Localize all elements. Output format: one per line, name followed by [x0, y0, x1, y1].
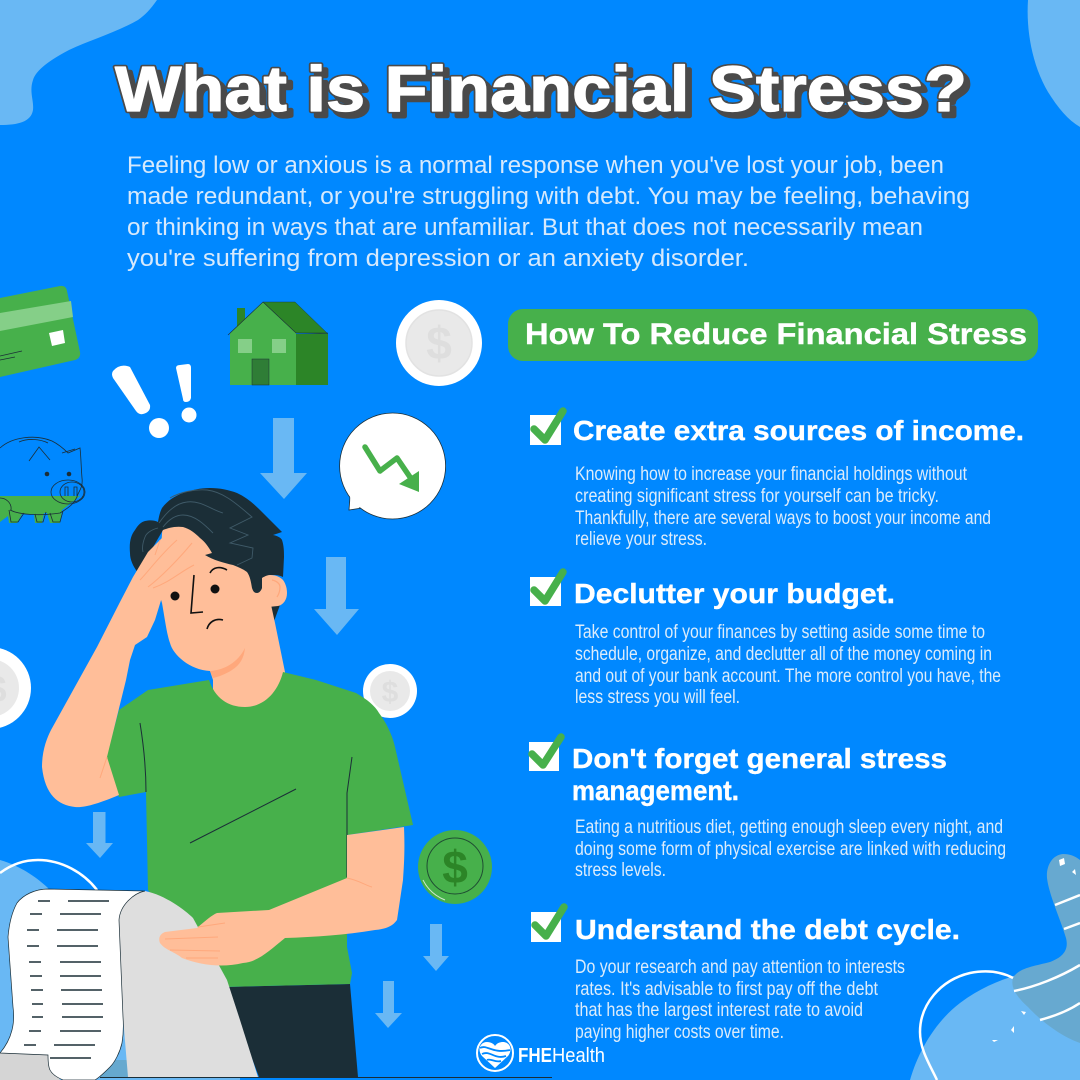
item 3 body: stress levels. — [575, 860, 666, 881]
item 1 heading: Create extra sources of income. — [573, 415, 1024, 446]
icon: silver coin small: $ — [382, 676, 399, 709]
blob: top right — [1028, 0, 1080, 127]
intro paragraph: made redundant, or you're struggling with debt. You may be feeling, behaving — [127, 183, 970, 210]
item 3 heading — [572, 743, 947, 806]
item 2 heading: Declutter your budget. — [574, 578, 895, 609]
hair — [130, 488, 284, 593]
logo: FHE Health: Health — [552, 1045, 605, 1067]
brow nose and mouth — [191, 568, 227, 629]
logo: FHE Health: FHE — [518, 1045, 552, 1067]
item 3 body: doing some form of physical exercise are linked with reducing — [575, 839, 1006, 860]
blob: bottom right — [910, 854, 1080, 1080]
arrow: right of head — [314, 557, 359, 635]
item 2 body: and out of your bank account. The more control you have, the — [575, 666, 1001, 687]
arrow: lower right two — [375, 981, 402, 1028]
title: What is Financial Stress? — [115, 53, 967, 125]
intro paragraph: Feeling low or anxious is a normal response when you've lost your job, been — [127, 152, 944, 179]
title: What is Financial Stress? — [120, 58, 972, 130]
icon: green dollar coin — [418, 830, 492, 904]
neck and face — [158, 518, 285, 712]
item 1 body: Knowing how to increase your financial holdings without — [575, 464, 968, 485]
check icon 4 — [531, 907, 564, 942]
intro paragraph — [127, 152, 970, 272]
hair behind neck — [268, 605, 280, 624]
check icon 1 — [530, 411, 563, 445]
arrow: below house — [260, 418, 307, 499]
title: What is Financial Stress? — [115, 53, 967, 125]
blob: top left — [0, 0, 157, 125]
chin shadow — [210, 648, 245, 678]
icon: silver coin left — [0, 647, 31, 729]
arrow: left small — [86, 812, 113, 858]
icon: silver coin small — [363, 664, 417, 718]
item 4 body: rates. It's advisable to first pay off the debt — [575, 979, 879, 1000]
item 1 body — [575, 464, 991, 550]
raised arm and hand — [42, 536, 194, 807]
item 2 body: Take control of your finances by setting aside some time to — [575, 622, 985, 643]
logo: FHE Health — [477, 1035, 605, 1071]
item 1 body: Thankfully, there are several ways to boost your income and — [575, 508, 991, 529]
item 1: extra income — [530, 411, 1024, 550]
illustration: stressed man — [0, 488, 413, 1080]
item 3 body: Eating a nutritious diet, getting enough sleep every night, and — [575, 817, 1003, 838]
item 2 body — [575, 622, 1001, 708]
lower arm and hand — [159, 827, 404, 965]
item 4 body: Do your research and pay attention to interests — [575, 957, 905, 978]
icon: speech bubble with falling chart — [340, 413, 446, 519]
item 4 body: paying higher costs over time. — [575, 1022, 784, 1043]
check icon 3 — [529, 737, 561, 771]
item 4 body — [575, 957, 905, 1043]
icon: green dollar coin: $ — [442, 841, 468, 893]
icon: house — [228, 302, 328, 385]
icon: credit card — [0, 286, 80, 377]
icon: piggy bank — [0, 437, 85, 523]
receipt paper — [0, 889, 258, 1080]
intro paragraph: you're suffering from depression or an anxiety disorder. — [127, 245, 749, 272]
eyes — [170, 584, 220, 600]
item 4 heading: Understand the debt cycle. — [575, 914, 960, 945]
item 4: debt cycle — [531, 907, 960, 1043]
item 3 body — [575, 817, 1006, 881]
green t-shirt — [106, 672, 413, 987]
icon: silver coin top: $ — [426, 317, 452, 369]
blob: bottom left — [0, 860, 240, 1080]
ear — [262, 575, 287, 607]
item 2 body: less stress you will feel. — [575, 687, 740, 708]
banner heading — [508, 309, 1038, 361]
floor line — [100, 1076, 552, 1078]
item 1 body: creating significant stress for yourself can be tricky. — [575, 486, 939, 507]
arrow: lower right one — [423, 924, 449, 971]
check icon 2 — [530, 572, 563, 606]
item 2 body: schedule, organize, and declutter all of the money coming in — [575, 644, 992, 665]
icon: exclamation marks — [112, 364, 196, 438]
item 2: declutter budget — [530, 572, 1001, 708]
item 3 heading: Don't forget general stress — [572, 743, 947, 774]
banner heading: How To Reduce Financial Stress — [525, 318, 1027, 351]
icon: silver coin top — [396, 300, 482, 386]
trousers — [225, 984, 358, 1077]
item 3: stress management — [529, 737, 1006, 881]
intro paragraph: or thinking in ways that are unfamiliar. But that does not necessarily mean — [127, 214, 923, 241]
item 1 body: relieve your stress. — [575, 529, 707, 550]
item 3 heading: management. — [572, 775, 739, 806]
item 4 body: that has the largest interest rate to avoid — [575, 1000, 863, 1021]
